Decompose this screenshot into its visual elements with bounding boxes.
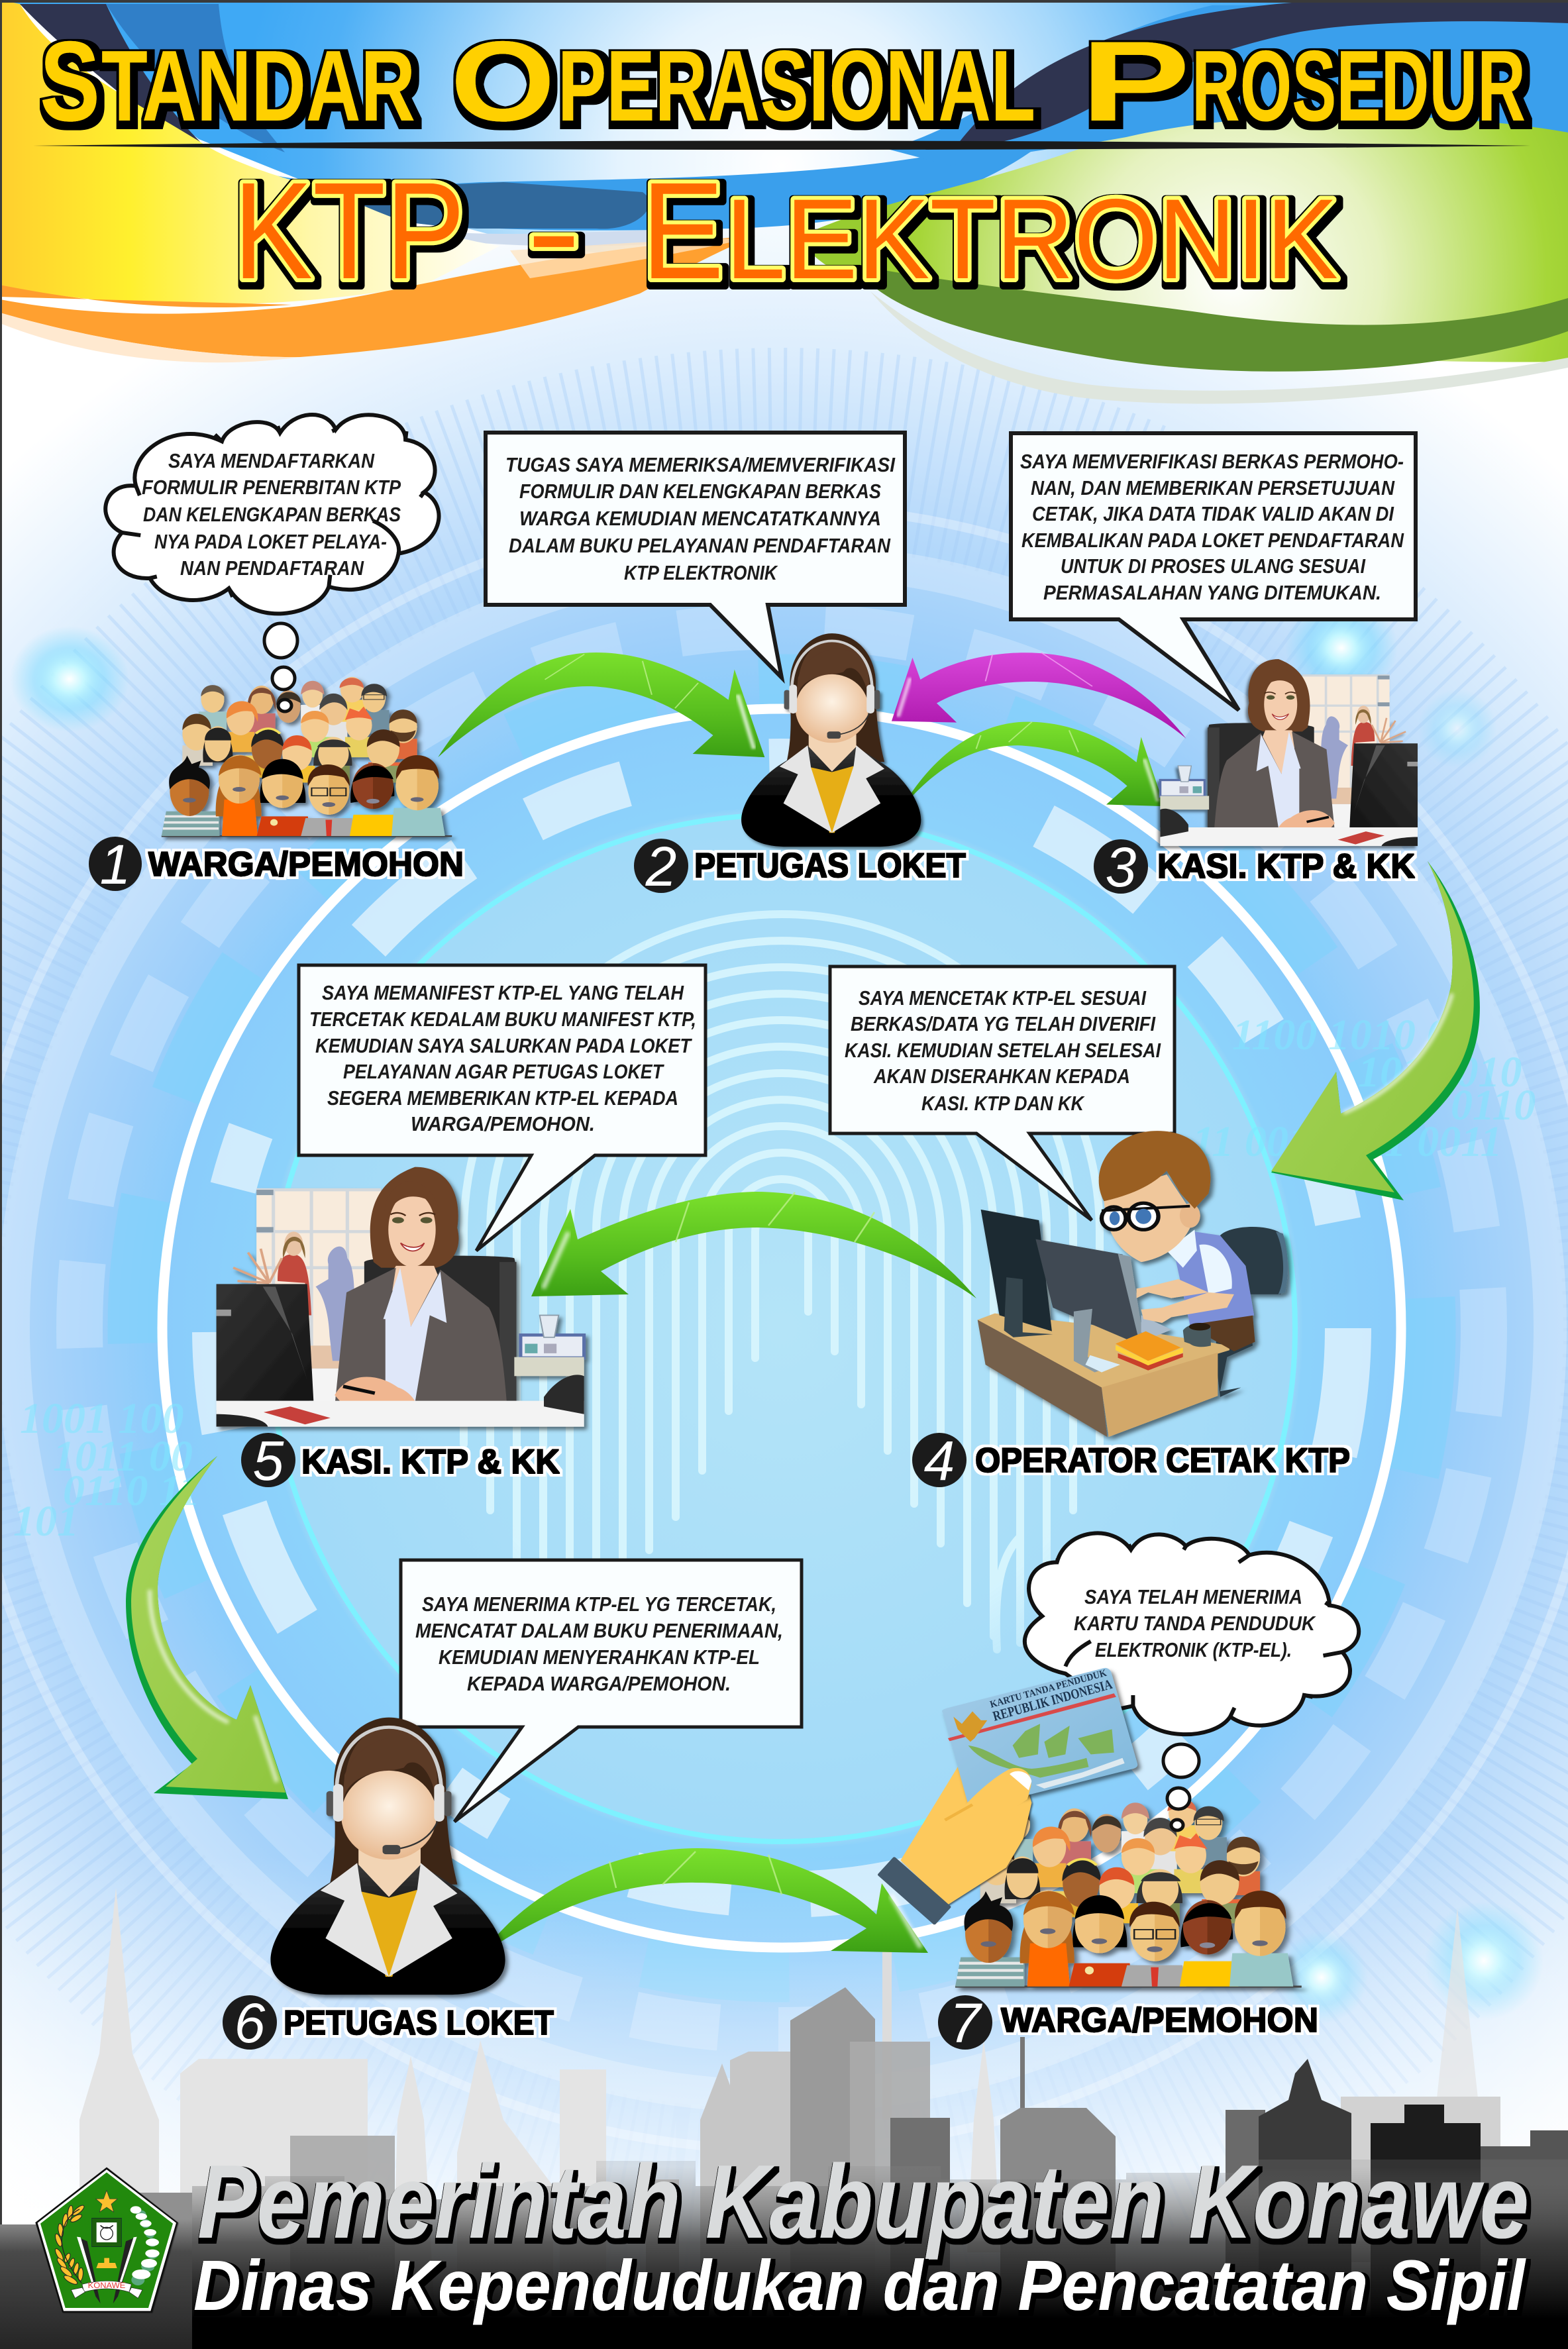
label: petugas loket: PETUGAS LOKET: [284, 2004, 554, 2042]
icon: hand holding KTP card: REPUBLIK INDONESIA: [991, 1676, 1114, 1724]
panel: step 1 warga pemohon: [89, 415, 464, 896]
callout text step 4: KASI. KTP DAN KK: [921, 1092, 1085, 1115]
binary digits: [13, 1011, 1536, 1545]
panel: step 7 warga pemohon: [880, 1533, 1359, 2054]
icon: crowd of citizens: [955, 1798, 1302, 1988]
callout text step 3: KEMBALIKAN PADA LOKET PENDAFTARAN: [1021, 529, 1404, 552]
callout text step 5: WARGA/PEMOHON.: [411, 1112, 595, 1135]
title: Standar Operasional Prosedur: [40, 18, 1526, 145]
callout text step 1: NYA PADA LOKET PELAYA-: [154, 530, 387, 553]
icon: woman at office desk: [1160, 659, 1418, 846]
panel: step 3 kasi ktp kk: [1011, 433, 1418, 898]
callout text step 4: [845, 986, 1161, 1115]
callout text step 1: FORMULIR PENERBITAN KTP: [142, 476, 401, 499]
callout text step 5: SEGERA MEMBERIKAN KTP-EL KEPADA: [327, 1086, 678, 1110]
arrow: 3 to 4: [1271, 861, 1480, 1200]
arrow: 1 to 2: [438, 652, 764, 757]
step badge 1: [89, 833, 142, 896]
binary digits: 1011 00: [53, 1432, 193, 1481]
callout text step 3: PERMASALAHAN YANG DITEMUKAN.: [1043, 581, 1381, 604]
callout text step 1: [142, 449, 401, 580]
speech bubble 3: [1011, 433, 1416, 710]
panel: step 6 petugas loket: [223, 1560, 802, 2054]
arrow: 2 to 3 (green): [902, 722, 1165, 808]
step badge 6: [223, 1992, 277, 2054]
arrow: 5 to 6: [126, 1456, 288, 1799]
title: Standar Operasional Prosedur: TANDAR: [101, 30, 415, 142]
panel: step 5 kasi ktp kk: [217, 965, 706, 1492]
callout text step 7: SAYA TELAH MENERIMA: [1084, 1585, 1302, 1608]
banner divider line: [33, 140, 1530, 150]
thought cloud 7: [1025, 1533, 1359, 1734]
callout text step 6: [415, 1592, 783, 1695]
icon: crowd of citizens: [162, 677, 452, 837]
title: KTP - Elektronik: KTP: [233, 154, 465, 308]
title: Standar Operasional Prosedur: O: [450, 18, 555, 145]
title: Standar Operasional Prosedur: S: [40, 18, 100, 145]
callout text step 4: SAYA MENCETAK KTP-EL SESUAI: [859, 986, 1147, 1010]
arrow: 4 to 5: [531, 1192, 976, 1298]
callout text step 3: SAYA MEMVERIFIKASI BERKAS PERMOHO-: [1020, 450, 1404, 473]
title: KTP - Elektronik: E: [641, 154, 724, 308]
callout text step 2: TUGAS SAYA MEMERIKSA/MEMVERIFIKASI: [505, 453, 896, 476]
callout text step 4: BERKAS/DATA YG TELAH DIVERIFI: [851, 1012, 1156, 1035]
binary digits: 0110 11: [63, 1467, 200, 1515]
step badge 3: 3: [1106, 836, 1136, 898]
callout text step 6: MENCATAT DALAM BUKU PENERIMAAN,: [415, 1619, 783, 1642]
thought dots 1: [264, 623, 297, 711]
label: warga/pemohon: WARGA/PEMOHON: [1001, 2001, 1318, 2040]
title: KTP - Elektronik: -: [527, 154, 581, 308]
thought cloud 1: [105, 415, 439, 613]
step badge 7: 7: [950, 1992, 983, 2054]
label: kasi ktp kk: KASI. KTP & KK: [1157, 847, 1415, 886]
speech bubble 6: [401, 1560, 802, 1822]
callout text step 4: AKAN DISERAHKAN KEPADA: [873, 1065, 1130, 1088]
speech bubble 2: [486, 433, 905, 678]
step badge 3: [1094, 836, 1148, 898]
label: operator cetak ktp: OPERATOR CETAK KTP: [975, 1441, 1350, 1480]
step badge 6: 6: [235, 1992, 266, 2054]
fingerprint pattern: [464, 914, 1100, 1649]
callout text step 3: NAN, DAN MEMBERIKAN PERSETUJUAN: [1031, 476, 1395, 499]
panel: step 4 operator: [830, 966, 1350, 1492]
callout text step 7: ELEKTRONIK (KTP-EL).: [1095, 1638, 1292, 1661]
icon: call centre agent: [270, 1718, 505, 1995]
callout text step 4: KASI. KEMUDIAN SETELAH SELESAI: [845, 1039, 1161, 1062]
callout text step 5: TERCETAK KEDALAM BUKU MANIFEST KTP,: [309, 1008, 696, 1031]
label: warga/pemohon: WARGA/PEMOHON: [148, 845, 464, 884]
title: KTP - Elektronik: LEKTRONIK: [725, 176, 1338, 303]
callout text step 3: CETAK, JIKA DATA TIDAK VALID AKAN DI: [1032, 502, 1394, 525]
title: Standar Operasional Prosedur: PERASIONAL: [558, 30, 1035, 142]
callout text step 6: KEPADA WARGA/PEMOHON.: [467, 1672, 731, 1695]
speech bubble 5: [299, 965, 706, 1251]
callout text step 1: NAN PENDAFTARAN: [180, 556, 364, 580]
icon: hand holding KTP card: [880, 1668, 1137, 1923]
panel: step 2 petugas loket: [486, 433, 966, 898]
callout text step 2: KTP ELEKTRONIK: [624, 561, 778, 584]
binary digits: 101: [13, 1497, 79, 1545]
icon: hand holding KTP card: KARTU TANDA PENDUDUK: [989, 1668, 1108, 1710]
arrow: 6 to 7: [482, 1848, 928, 1954]
step badge 5: [241, 1430, 295, 1492]
icon: call centre agent: [741, 633, 921, 847]
callout text step 2: DALAM BUKU PELAYANAN PENDAFTARAN: [509, 534, 891, 557]
callout text step 3: [1020, 450, 1404, 604]
title: KTP - Elektronik: [233, 154, 1338, 308]
callout text step 7: [1074, 1585, 1316, 1661]
arrow: 3 back to 2 (magenta): [892, 652, 1186, 739]
step badge 1: 1: [100, 833, 131, 896]
speech bubble 4: [830, 966, 1175, 1220]
callout text step 2: FORMULIR DAN KELENGKAPAN BERKAS: [519, 480, 881, 503]
top banner swooshes: [0, 0, 1568, 404]
icon: woman at office desk: [217, 1167, 584, 1427]
callout text step 7: KARTU TANDA PENDUDUK: [1074, 1612, 1316, 1635]
callout text step 5: PELAYANAN AGAR PETUGAS LOKET: [343, 1060, 665, 1083]
thought dots 7: [1163, 1744, 1199, 1830]
icon: operator at computer: [978, 1131, 1288, 1437]
emblem: Kabupaten Konawe: [35, 2167, 178, 2313]
binary digits: 101 0010: [1358, 1048, 1522, 1096]
binary digits: 11 001 1011 0011: [1192, 1118, 1502, 1166]
callout text step 6: KEMUDIAN MENYERAHKAN KTP-EL: [439, 1645, 760, 1669]
binary digits: 1001 100: [20, 1394, 184, 1443]
title: Standar Operasional Prosedur: P: [1080, 18, 1190, 145]
step badge 7: [938, 1992, 992, 2054]
callout text step 1: DAN KELENGKAPAN BERKAS: [143, 503, 401, 526]
label: petugas loket: PETUGAS LOKET: [694, 847, 966, 885]
binary digits: 1100 1010 01: [1232, 1011, 1470, 1059]
step badge 5: 5: [253, 1430, 284, 1492]
step badge 4: 4: [924, 1430, 955, 1492]
callout text step 3: UNTUK DI PROSES ULANG SESUAI: [1061, 554, 1366, 578]
step badge 4: [912, 1430, 967, 1492]
callout text step 2: [505, 453, 896, 584]
skyline silhouette: [0, 1888, 1568, 2349]
callout text step 5: [309, 981, 696, 1135]
binary digits: 0110: [1451, 1081, 1536, 1129]
emblem: Kabupaten Konawe: KONAWE: [88, 2281, 125, 2290]
step badge 2: [634, 835, 688, 898]
callout text step 5: KEMUDIAN SAYA SALURKAN PADA LOKET: [315, 1034, 693, 1057]
callout text step 5: SAYA MEMANIFEST KTP-EL YANG TELAH: [322, 981, 684, 1004]
callout text step 2: WARGA KEMUDIAN MENCATATKANNYA: [519, 507, 881, 530]
step badge 2: 2: [645, 835, 676, 898]
callout text step 1: SAYA MENDAFTARKAN: [168, 449, 375, 472]
label: kasi ktp kk: KASI. KTP & KK: [301, 1443, 560, 1481]
callout text step 6: SAYA MENERIMA KTP-EL YG TERCETAK,: [422, 1592, 776, 1616]
